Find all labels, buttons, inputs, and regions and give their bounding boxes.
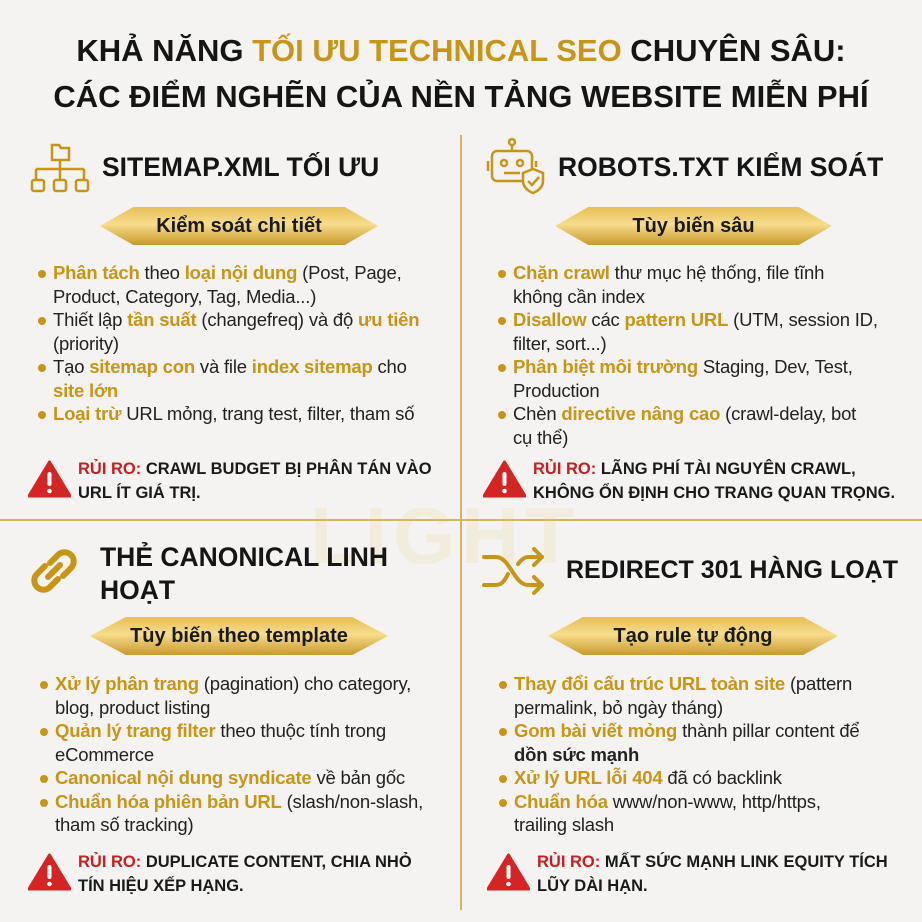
bullets: Product, Category, Tag, Media...) xyxy=(53,286,316,306)
bullets xyxy=(499,673,860,835)
panel: redirect xyxy=(482,547,898,895)
bullets: blog, product listing xyxy=(55,696,210,718)
panel: redirect: RỦI RO: MẤT SỨC MẠNH LINK EQUITY TÍCH xyxy=(537,853,888,871)
bullets: eCommerce xyxy=(55,744,154,764)
icon: sitemap xyxy=(30,144,90,192)
bullets: Thay đổi cấu trúc URL toàn site (pattern xyxy=(514,673,852,694)
bullets: Chặn crawl thư mục hệ thống, file tĩnh xyxy=(513,262,824,283)
banner: Kiểm soát chi tiết xyxy=(156,214,322,236)
bullets: dồn sức mạnh xyxy=(514,744,639,764)
bullets: Xử lý phân trang (pagination) cho category, xyxy=(55,673,411,694)
banner xyxy=(548,617,838,655)
banner xyxy=(100,207,378,245)
bullets: Phân tách theo loại nội dung (Post, Page, xyxy=(53,262,402,283)
banner: Tùy biến sâu xyxy=(632,214,755,236)
bullets: filter, sort...) xyxy=(513,332,606,354)
icon: link xyxy=(31,549,77,593)
bullets xyxy=(38,262,419,424)
bullets: Thiết lập tần suất (changefreq) và độ ưu tiên xyxy=(53,309,419,330)
panel: canonical: TÍN HIỆU XẾP HẠNG. xyxy=(78,877,244,895)
heading: ROBOTS.TXT KIỂM SOÁT xyxy=(558,152,883,182)
banner: Tạo rule tự động xyxy=(614,624,772,646)
panel: canonical: RỦI RO: DUPLICATE CONTENT, CHIA NHỎ xyxy=(78,853,412,871)
bullets xyxy=(40,673,423,835)
bullets: Xử lý URL lỗi 404 đã có backlink xyxy=(514,767,782,788)
bullets xyxy=(498,262,878,448)
icon: shuffle xyxy=(482,547,544,595)
bullets: Gom bài viết mỏng thành pillar content để xyxy=(514,720,860,741)
icon: robot xyxy=(486,138,544,194)
heading: THẺ CANONICAL LINH xyxy=(100,542,388,572)
panel: redirect: LŨY DÀI HẠN. xyxy=(537,877,648,895)
risk xyxy=(28,459,432,502)
bullets: Loại trừ URL mỏng, trang test, filter, tham số xyxy=(53,403,414,424)
title xyxy=(53,33,870,114)
panel: sitemap xyxy=(28,144,432,502)
risk xyxy=(487,852,888,895)
bullets: không cần index xyxy=(513,286,645,306)
panel: canonical xyxy=(28,542,423,895)
title: CÁC ĐIỂM NGHẼN CỦA NỀN TẢNG WEBSITE MIỄN PHÍ xyxy=(53,79,869,114)
watermark: LIGHT xyxy=(310,491,580,580)
heading: HOẠT xyxy=(100,575,175,605)
panel: sitemap: RỦI RO: CRAWL BUDGET BỊ PHÂN TÁN VÀO xyxy=(78,460,432,478)
heading: REDIRECT 301 HÀNG LOẠT xyxy=(566,556,898,584)
panel: robots xyxy=(483,138,895,502)
bullets: Phân biệt môi trường Staging, Dev, Test, xyxy=(513,356,853,377)
bullets: tham số tracking) xyxy=(55,814,194,835)
bullets: Chèn directive nâng cao (crawl-delay, bot xyxy=(513,403,856,424)
bullets: Chuẩn hóa phiên bản URL (slash/non-slash, xyxy=(55,790,423,812)
panel: robots: RỦI RO: LÃNG PHÍ TÀI NGUYÊN CRAWL, xyxy=(533,460,856,478)
risk xyxy=(28,852,412,895)
bullets: site lớn xyxy=(53,380,118,400)
bullets: Tạo sitemap con và file index sitemap cho xyxy=(53,356,407,377)
banner xyxy=(555,207,832,245)
heading xyxy=(100,542,388,605)
heading: SITEMAP.XML TỐI ƯU xyxy=(102,152,379,182)
bullets: (priority) xyxy=(53,332,119,354)
bullets: Quản lý trang filter theo thuộc tính trong xyxy=(55,720,386,741)
bullets: permalink, bỏ ngày tháng) xyxy=(514,696,723,718)
risk xyxy=(483,459,895,502)
bullets: Canonical nội dung syndicate về bản gốc xyxy=(55,767,405,788)
banner: Tùy biến theo template xyxy=(130,624,348,646)
bullets: cụ thể) xyxy=(513,426,568,448)
bullets: trailing slash xyxy=(514,814,614,835)
bullets: Disallow các pattern URL (UTM, session ID, xyxy=(513,309,878,330)
panel: sitemap: URL ÍT GIÁ TRỊ. xyxy=(78,484,201,502)
banner xyxy=(90,617,388,655)
title: KHẢ NĂNG TỐI ƯU TECHNICAL SEO CHUYÊN SÂU: xyxy=(76,33,846,68)
bullets: Production xyxy=(513,380,599,400)
panel: robots: KHÔNG ỔN ĐỊNH CHO TRANG QUAN TRỌNG. xyxy=(533,484,895,502)
bullets: Chuẩn hóa www/non-www, http/https, xyxy=(514,790,821,812)
